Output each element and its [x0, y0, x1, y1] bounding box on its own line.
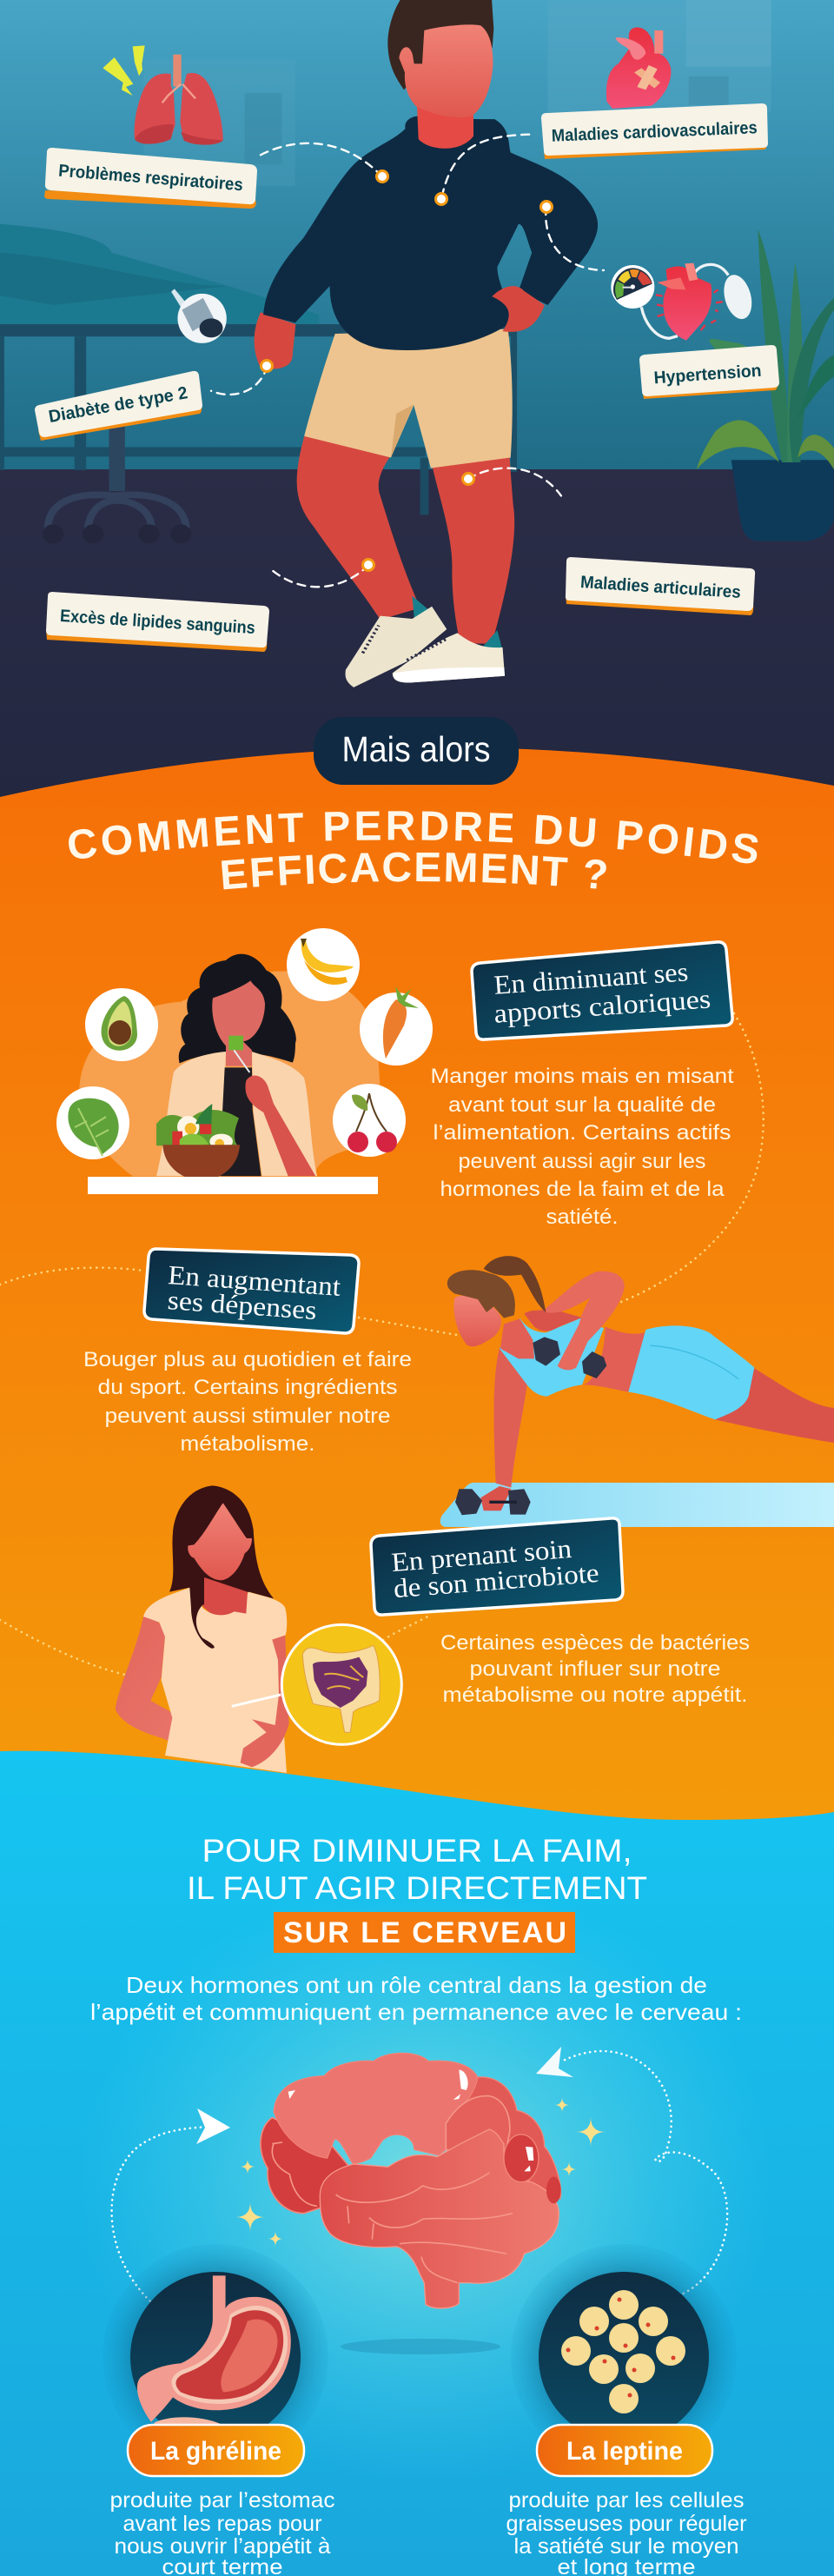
label: hypertension — [639, 345, 779, 399]
panel: blue section — [0, 1751, 834, 2576]
icon: blood pressure heart — [611, 263, 757, 341]
text: apports caloriques: peuvent aussi agir sur les — [459, 1150, 705, 1173]
label: diabète de type 2 — [35, 371, 202, 441]
icon: glucose meter — [171, 289, 227, 343]
heading: pour diminuer la faim: SUR LE CERVEAU — [283, 1916, 566, 1949]
text: microbiote: pouvant influer sur notre — [469, 1657, 721, 1681]
text: leptine: la satiété sur le moyen — [514, 2534, 738, 2559]
table — [88, 1177, 378, 1194]
badge: mais alors — [314, 717, 519, 785]
text: ghréline: nous ouvrir l’appétit à — [115, 2534, 331, 2559]
text: apports caloriques: avant tout sur la qualité de — [448, 1093, 716, 1117]
icon: carrot — [360, 986, 433, 1066]
label: maladies cardiovasculaires — [541, 103, 768, 159]
text: microbiote — [440, 1631, 750, 1707]
text: microbiote: Certaines espèces de bactéries — [440, 1631, 750, 1655]
illustration: brain — [261, 2053, 561, 2308]
heading: en augmentant ses dépenses: ses dépenses — [167, 1285, 318, 1325]
exercise mat — [440, 1483, 834, 1527]
text: apports caloriques: satiété. — [546, 1205, 619, 1229]
brain shadow — [341, 2339, 500, 2354]
icon: stomach — [103, 2244, 328, 2470]
text: intro hormones: Deux hormones ont un rôle central dans la gestion de — [126, 1972, 707, 1998]
text: intro hormones: l’appétit et communiquent en permanence avec le cerveau : — [90, 1999, 742, 2025]
text: apports caloriques — [431, 1065, 734, 1229]
woman — [156, 954, 317, 1180]
illustration: woman with microbiota — [116, 1485, 401, 1773]
heading: en augmentant ses dépenses — [144, 1249, 359, 1333]
heading: en prenant soin de son microbiote: En prenant soin — [390, 1533, 573, 1577]
text: apports caloriques: Manger moins mais en misant — [431, 1065, 734, 1088]
label: excès de lipides sanguins — [46, 592, 269, 652]
text: apports caloriques: hormones de la faim et de la — [440, 1178, 725, 1201]
text: microbiote: métabolisme ou notre appétit. — [443, 1683, 747, 1707]
icon: lungs — [103, 45, 223, 145]
heading: en diminuant ses apports caloriques: En diminuant ses — [493, 956, 689, 1000]
room background — [0, 0, 834, 543]
text: ghréline: avant les repas pour — [123, 2512, 321, 2536]
text: leptine — [506, 2488, 747, 2576]
heading: pour diminuer la faim: POUR DIMINUER LA FAIM, — [202, 1833, 632, 1869]
sparkles — [235, 2097, 606, 2247]
icon: cherries — [333, 1084, 406, 1157]
text: leptine: produite par les cellules — [509, 2488, 744, 2513]
illustration: woman eating salad — [56, 928, 433, 1194]
text: dépenses — [83, 1348, 412, 1456]
dashed connectors — [211, 135, 604, 587]
text: dépenses: métabolisme. — [181, 1432, 314, 1456]
heading: en prenant soin de son microbiote: de son microbiote — [393, 1557, 600, 1603]
text: dépenses: Bouger plus au quotidien et faire — [83, 1348, 412, 1371]
badge: mais alors: Mais alors — [342, 729, 490, 769]
text: ghréline — [109, 2488, 335, 2576]
label: maladies cardiovasculaires: Maladies cardiovasculaires — [551, 118, 758, 146]
pill: la leptine: La leptine — [566, 2437, 683, 2466]
icon: intestines — [232, 1624, 401, 1744]
panel: orange section — [0, 747, 834, 1851]
text: apports caloriques: l’alimentation. Certains actifs — [433, 1121, 731, 1145]
label: maladies articulaires: Maladies articulaires — [579, 573, 741, 602]
panel: room with health risks — [0, 0, 834, 852]
text: dépenses: du sport. Certains ingrédients — [97, 1376, 398, 1399]
illustration: woman doing plank with dumbbells — [447, 1256, 834, 1515]
dotted arrows — [112, 2047, 727, 2301]
heading: pour diminuer la faim: IL FAUT AGIR DIRECTEMENT — [187, 1870, 647, 1906]
label: diabète de type 2: Diabète de type 2 — [47, 383, 189, 427]
marker points — [261, 170, 553, 570]
text: leptine: graisseuses pour réguler — [506, 2512, 747, 2536]
label: maladies articulaires — [566, 557, 755, 615]
icon: spinach — [56, 1086, 129, 1159]
text: intro hormones — [90, 1972, 742, 2025]
heading: en prenant soin de son microbiote — [371, 1518, 623, 1615]
label: hypertension: Hypertension — [653, 362, 762, 388]
text: ghréline: produite par l’estomac — [109, 2488, 335, 2513]
heading: en augmentant ses dépenses: En augmentant — [167, 1259, 342, 1302]
text: dépenses: peuvent aussi stimuler notre — [104, 1404, 391, 1428]
person with overweight — [255, 0, 598, 687]
dotted connectors — [0, 1013, 764, 1675]
icon: fat cells — [511, 2244, 737, 2470]
icon: banana — [287, 928, 360, 1001]
heading: en diminuant ses apports caloriques — [472, 942, 732, 1039]
label: problèmes respiratoires: Problèmes respiratoires — [57, 162, 244, 195]
pill: la ghréline: La ghréline — [150, 2437, 281, 2466]
title: EFFICACEMENT ? — [221, 852, 606, 890]
icon: avocado — [85, 988, 158, 1061]
blob — [79, 971, 383, 1177]
heading: pour diminuer la faim — [187, 1833, 647, 1953]
heading: en diminuant ses apports caloriques: apports caloriques — [493, 983, 712, 1029]
label: excès de lipides sanguins: Excès de lipides sanguins — [59, 607, 255, 638]
label: problèmes respiratoires — [44, 148, 257, 209]
pill: la ghréline — [128, 2425, 304, 2476]
icon: bandaged heart — [606, 28, 671, 109]
pill: la leptine — [537, 2425, 712, 2476]
title: COMMENT PERDRE DU POIDS — [69, 811, 758, 864]
